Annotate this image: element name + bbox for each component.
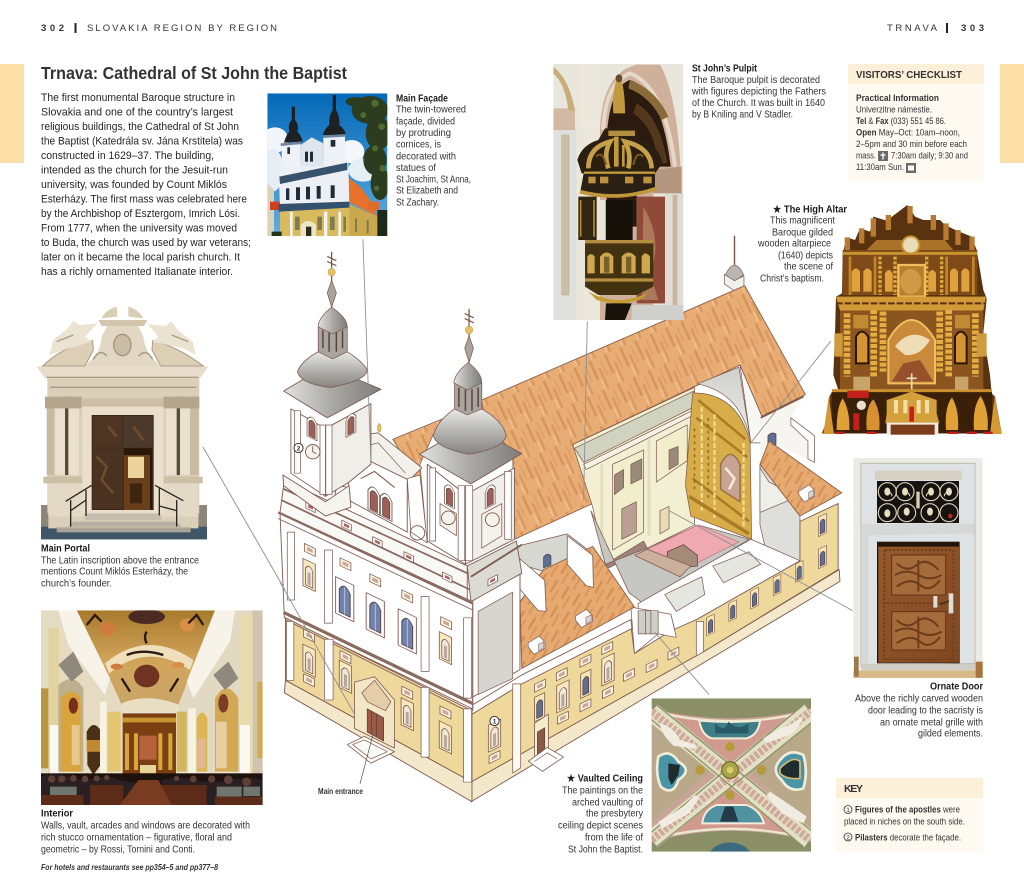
left tower <box>283 252 381 516</box>
intro text block: religious buildings, the Cathedral of St John <box>41 121 239 133</box>
caption: ornate door: Above the richly carved wooden <box>855 694 983 704</box>
caption: main facade <box>396 94 471 208</box>
caption: main facade: The twin-towered <box>396 104 466 116</box>
right wall stub <box>740 365 762 443</box>
altar table <box>667 545 697 568</box>
arch recess <box>607 80 671 227</box>
wall paintings and panels <box>602 425 687 568</box>
caption: vaulted ceiling: St John the Baptist. <box>568 844 643 856</box>
columns <box>54 407 190 475</box>
aisle partition walls <box>520 559 546 611</box>
grey nave floor <box>591 511 749 604</box>
running header right <box>887 23 984 34</box>
checklist details: Univerzitne námestie. <box>856 104 932 114</box>
leader line: pulpit <box>584 321 587 502</box>
page tab left <box>0 64 24 163</box>
caption: vaulted ceiling: ceiling depict scenes <box>558 820 643 832</box>
key marker 1: 1 <box>493 718 497 726</box>
stone body <box>47 377 199 528</box>
ground and base <box>41 505 207 539</box>
arch outer <box>600 65 681 320</box>
door frame <box>82 407 164 513</box>
tower caps <box>284 107 303 143</box>
checklist details: Tel & Fax (033) 551 45 86. <box>856 116 946 126</box>
caption: the high altar: Christ’s baptism. <box>760 274 824 284</box>
caption: main facade: decorated with <box>396 152 456 162</box>
facade windows <box>303 502 452 754</box>
checklist details: Practical Information <box>856 93 939 104</box>
predella <box>832 390 992 433</box>
left pilasters <box>100 702 107 773</box>
right transept <box>760 396 814 462</box>
caption: the high altar <box>757 204 847 284</box>
caption: vaulted ceiling: ★ Vaulted Ceiling <box>567 774 643 784</box>
intro text block: intended as the church for the Jesuit-run <box>41 164 228 176</box>
wall cornice <box>575 391 694 462</box>
caption: st john's pulpit: The Baroque pulpit is decorated <box>692 75 820 86</box>
caption: interior: Walls, vault, arcades and windows are decorated with <box>41 820 250 832</box>
leader line: ornate door <box>669 511 853 611</box>
caption: main facade: cornices, is <box>396 140 441 150</box>
caption: main portal: mentions Count Miklós Esterházy, the <box>41 566 188 578</box>
running header right: 303 <box>961 23 984 34</box>
checklist heading: VISITORS’ CHECKLIST <box>856 69 963 81</box>
yellow side wall <box>471 504 838 782</box>
intro text block: Esterházy. The first mass was celebrated here <box>41 194 247 206</box>
leader line: main portal <box>280 582 355 714</box>
facade pilasters <box>287 532 472 782</box>
intro text block: constructed in 1629–37. The building, <box>41 150 214 162</box>
red presbytery floor <box>647 525 739 566</box>
key marker 2 <box>294 443 303 453</box>
pulpit column back <box>606 200 633 240</box>
caption: main facade: St Elizabeth and <box>396 186 458 196</box>
railings <box>66 485 183 527</box>
rear finial <box>724 236 744 292</box>
intro text block: has a richly ornamented Italianate interior. <box>41 266 233 278</box>
checklist details: 2–5pm and 30 min before each <box>856 139 967 149</box>
title: Trnava: Cathedral of St John the Baptist <box>41 63 347 83</box>
entablature <box>836 297 986 311</box>
checklist details: 7:30am daily; 9:30 and <box>891 150 968 160</box>
side door and steps <box>528 714 564 771</box>
panel: key <box>836 778 983 852</box>
caption: ornate door: Ornate Door <box>930 682 983 692</box>
intro text block <box>41 92 251 278</box>
gold ornaments <box>695 742 766 800</box>
right panel <box>776 752 806 790</box>
back orange roof <box>393 412 458 525</box>
transept roof <box>760 441 842 516</box>
key heading: KEY <box>844 783 863 795</box>
checklist details: Open May–Oct: 10am–noon, <box>856 128 960 138</box>
chancel steps <box>635 549 691 577</box>
side wall plinth <box>471 570 840 802</box>
caption: main portal: church’s founder. <box>41 578 112 590</box>
caption: main facade: façade, divided <box>396 116 455 128</box>
broken pediments <box>43 341 93 366</box>
lateral triangular sections <box>652 718 712 822</box>
intro text block: later on it became the local parish church. It <box>41 252 240 264</box>
entablature <box>37 367 208 378</box>
tree <box>346 96 391 200</box>
gable and central pediment <box>335 424 427 543</box>
main facade plinth <box>284 680 472 802</box>
checklist details <box>856 93 968 172</box>
panel: visitors' checklist <box>848 64 984 181</box>
leader line: main facade <box>363 239 371 461</box>
leader line: vaulted ceiling <box>655 632 709 695</box>
caption: main facade: statues of <box>396 163 436 174</box>
central crest <box>85 326 161 367</box>
caption: ornate door: door leading to the sacristy is <box>868 706 983 716</box>
main facade first storey <box>280 512 473 709</box>
transept inner walls <box>760 464 800 564</box>
orange roof <box>347 177 377 216</box>
towers bodies <box>282 136 345 164</box>
congregation <box>41 773 263 805</box>
main roof <box>482 286 805 539</box>
caption: interior <box>41 808 250 856</box>
yellow ground storey <box>280 208 349 236</box>
angels <box>49 321 97 355</box>
altar <box>123 713 176 775</box>
aisle roof <box>520 546 635 669</box>
checklist details: 11:30am Sun. <box>856 162 904 172</box>
main storey <box>840 311 983 390</box>
photo: vaulted ceiling <box>650 698 817 852</box>
caption: vaulted ceiling: the presbytery <box>586 808 643 820</box>
caption: main portal: Main Portal <box>41 544 90 554</box>
central gable <box>301 137 323 167</box>
left wall <box>41 610 123 772</box>
aisle interior wall <box>516 534 593 587</box>
cornices <box>279 163 347 184</box>
photo: ornate door <box>853 458 983 678</box>
caption: main portal: The Latin inscription above the entrance <box>41 556 199 566</box>
left panel <box>657 753 686 790</box>
caption: the high altar: This magnificent <box>770 216 835 226</box>
front block side wall <box>471 570 520 698</box>
photo: interior <box>41 609 263 805</box>
leader line: main entrance <box>360 736 373 784</box>
left house <box>267 183 274 236</box>
caption: the high altar: the scene of <box>784 262 833 272</box>
diagonal ribs <box>652 712 810 840</box>
photo: main facade <box>262 93 391 236</box>
reclining figures <box>660 723 697 749</box>
caption: main facade: Main Façade <box>396 94 448 104</box>
photo: st john's pulpit <box>553 64 683 320</box>
white wall tops and rooms <box>638 539 800 629</box>
running header left: SLOVAKIA REGION BY REGION <box>87 23 277 34</box>
vault <box>77 610 215 705</box>
key marker 2: 2 <box>297 446 301 452</box>
checklist details: mass. <box>856 150 876 160</box>
key item 1: 1 <box>846 807 850 814</box>
caption: interior: rich stucco ornamentation – figurative, floral and <box>41 832 232 844</box>
caption: ornate door: gilded elements. <box>918 728 983 740</box>
far yellow wall <box>347 203 378 236</box>
intro text block: The first monumental Baroque structure in <box>41 92 235 104</box>
intro text block: university, was founded by Count Miklós <box>41 179 228 191</box>
caption: st john's pulpit: with figures depicting the Fathers <box>691 86 826 98</box>
caption: main facade: St Joachim, St Anna, <box>396 174 471 186</box>
crown canopy <box>577 128 662 173</box>
icon: shop <box>906 163 916 173</box>
intro text block: by the Archbishop of Esztergom, Imrich Lósi. <box>41 208 240 220</box>
intro text block: From 1777, when the university was moved <box>41 222 237 234</box>
top panel <box>699 721 760 738</box>
key item 1: Figures of the apostles were <box>855 804 960 816</box>
photo: high altar <box>822 205 1002 435</box>
caption: vaulted ceiling: from the life of <box>585 832 643 844</box>
rim arcs <box>652 698 811 718</box>
leader line: portal end <box>203 447 285 590</box>
caption: main portal <box>41 544 199 590</box>
running header left: 302 <box>41 23 64 34</box>
side wall windows and niches <box>488 513 827 764</box>
caption: main facade: St Zachary. <box>396 198 439 208</box>
key heading <box>836 778 983 798</box>
page tab right <box>1000 64 1024 163</box>
caption: st john's pulpit: of the Church. It was built in 1640 <box>692 98 826 109</box>
caption: ornate door: an ornate metal grille with <box>880 718 983 728</box>
main facade upper storey <box>280 480 467 602</box>
key item 2: 2 <box>846 834 850 842</box>
caption: vaulted ceiling: arched vaulting of <box>572 798 643 808</box>
main entrance portal <box>347 677 395 763</box>
caption: ornate door <box>855 682 983 740</box>
key item 1 <box>844 804 965 826</box>
caption: the high altar: Baroque gilded <box>772 228 833 238</box>
photo: main portal <box>37 307 208 539</box>
upper storey <box>843 250 977 295</box>
caption: the high altar: (1640) depicts <box>778 250 833 262</box>
caption: interior: geometric – by Rossi, Tornini and Conti. <box>41 844 195 856</box>
side wall pilasters <box>513 621 704 773</box>
upper side storey <box>467 541 522 602</box>
right tower <box>420 309 522 564</box>
roof dormers <box>575 609 592 628</box>
caption: the high altar: ★ The High Altar <box>773 204 847 216</box>
caption: st john's pulpit <box>691 64 826 120</box>
footer cross-reference: For hotels and restaurants see pp354–5 and pp377–8 <box>41 862 218 872</box>
caption: the high altar: wooden altarpiece <box>757 238 831 250</box>
caption: st john's pulpit: by B Kniling and V Stadler. <box>692 110 793 120</box>
main facade yellow ground storey <box>285 618 472 782</box>
right wall painting <box>637 197 665 303</box>
steps <box>85 513 162 520</box>
caption: vaulted ceiling: The paintings on the <box>562 786 644 796</box>
running header right: TRNAVA <box>887 23 938 34</box>
bottom panel <box>702 805 764 823</box>
intro text block: the Baptist (Katedrála sv. Jána Krstitela) was <box>41 136 244 148</box>
pulpit <box>86 725 100 774</box>
gilded altar in cutaway <box>685 393 752 539</box>
leader line: high altar <box>751 341 831 443</box>
caption: main facade: by protruding <box>396 128 451 139</box>
altar silhouette <box>822 205 1002 433</box>
main white body <box>278 160 349 207</box>
facade cornice bands <box>278 512 473 714</box>
key item 1: placed in niches on the south side. <box>844 816 965 826</box>
caption: interior: Interior <box>41 808 73 820</box>
stepped ruined wall <box>631 607 676 654</box>
caption: st john's pulpit: St John’s Pulpit <box>692 64 758 74</box>
apse vault <box>697 367 751 443</box>
side wall cornice <box>472 620 632 714</box>
right wall <box>178 610 252 772</box>
label: main entrance: Main entrance <box>318 786 363 796</box>
statue <box>613 80 625 114</box>
basket <box>585 240 653 295</box>
central painting <box>888 320 935 383</box>
cross <box>907 373 917 392</box>
key marker 1 <box>490 716 499 726</box>
door <box>92 415 154 510</box>
key item 2: Pilasters decorate the façade. <box>855 832 961 844</box>
intro text block: to Buda, the church was used by war veterans; <box>41 237 251 249</box>
cutaway illustration of the cathedral <box>278 236 853 802</box>
canopy base <box>580 173 655 194</box>
icon: service cross <box>878 151 888 161</box>
left wall <box>553 127 577 320</box>
caption: vaulted ceiling <box>558 774 644 856</box>
intro text block: Slovakia and one of the country’s largest <box>41 106 233 118</box>
cutaway back wall <box>573 387 695 564</box>
